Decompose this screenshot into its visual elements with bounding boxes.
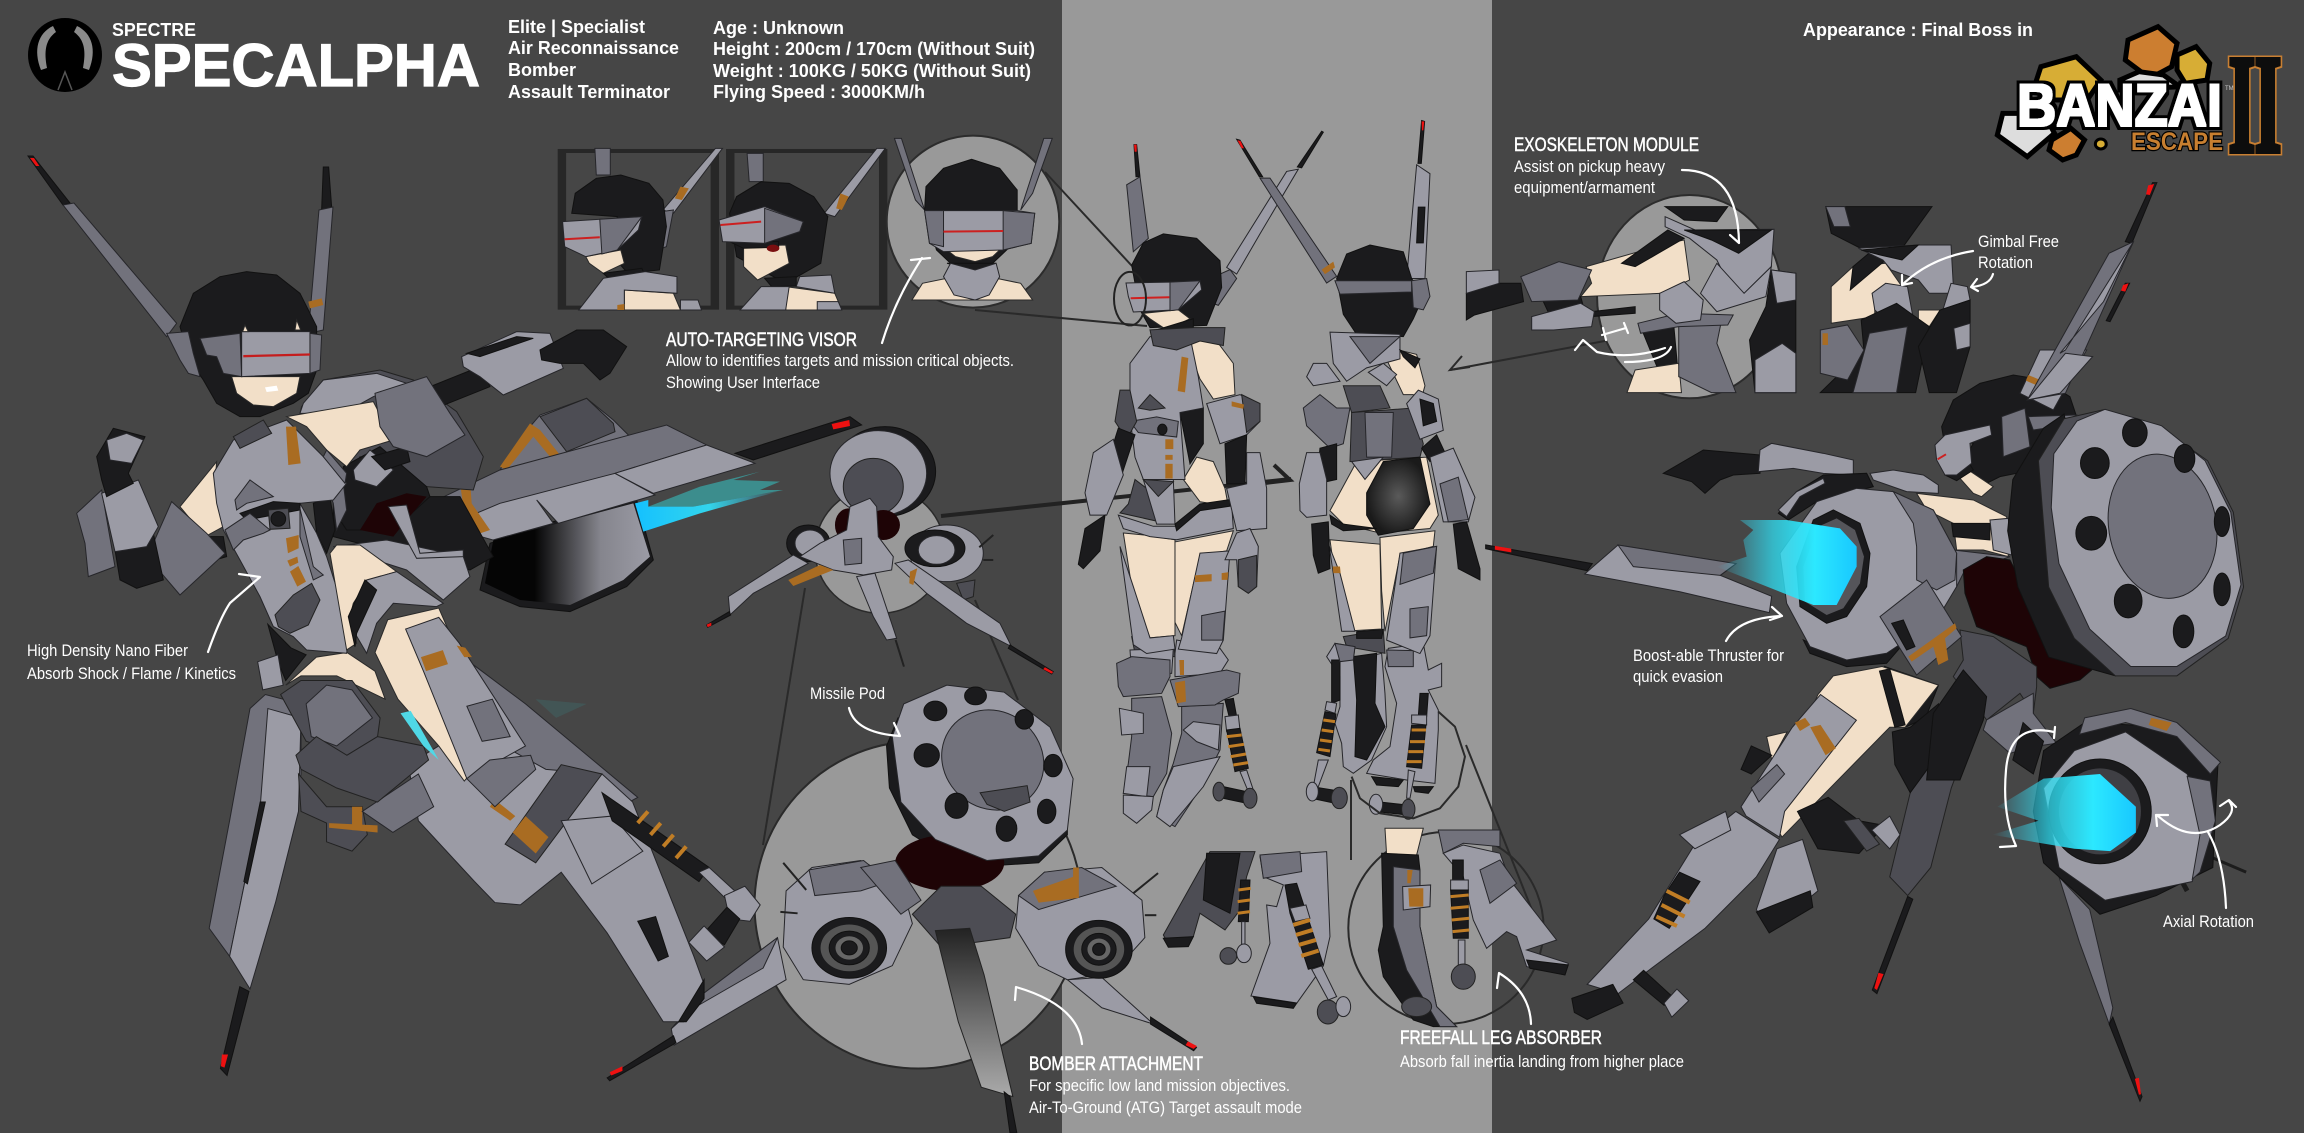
callout: nano fiber: High Density Nano Fiber — [27, 641, 188, 660]
back view lower legs — [1306, 629, 1465, 819]
callout: thruster — [1633, 607, 1784, 686]
banzai escape logo: BANZAI — [2017, 72, 2222, 139]
back legs thighs — [1329, 531, 1437, 654]
leg crop two — [1251, 852, 1351, 1024]
visor closed frame — [562, 148, 723, 310]
callout: thruster: Boost-able Thruster for — [1633, 646, 1784, 665]
front view figure — [1078, 131, 1323, 654]
stats list: Weight : 100KG / 50KG (Without Suit) — [713, 61, 1031, 81]
left figure raised hand — [540, 330, 627, 380]
callout: missile pod: Missile Pod — [810, 684, 885, 703]
head trio: visor detail — [562, 136, 1059, 310]
callout: auto-targeting visor: Allow to identifies targets and mission critical objects. — [666, 351, 1014, 370]
role list: Bomber — [508, 60, 576, 80]
callout: gimbal free rotation — [1902, 232, 2059, 291]
left figure torso and arms — [77, 332, 563, 653]
role list — [508, 17, 679, 102]
front arms — [1078, 390, 1267, 593]
exoskeleton circle view — [1466, 195, 1796, 398]
front legs thighs — [1120, 531, 1233, 654]
visor open frame — [719, 148, 885, 310]
logo mark — [28, 18, 102, 92]
back arms — [1299, 390, 1480, 580]
exoskeleton detail crops — [1466, 183, 2157, 400]
left figure lower blade — [209, 695, 378, 1076]
callout: bomber attachment — [1015, 987, 1302, 1117]
right thruster — [1016, 868, 1158, 980]
missile pod disk — [887, 685, 1073, 891]
callout: auto-targeting visor: AUTO-TARGETING VISOR — [666, 330, 857, 351]
callout: exoskeleton module: Assist on pickup heavy — [1514, 157, 1665, 176]
callout: gimbal free rotation: Gimbal Free — [1978, 232, 2059, 251]
banzai escape logo: ESCAPE — [2131, 128, 2223, 156]
callout: nano fiber — [27, 574, 260, 683]
callout: auto-targeting visor: Showing User Interface — [666, 373, 820, 392]
callout: exoskeleton module: EXOSKELETON MODULE — [1514, 135, 1699, 156]
stats list: Age : Unknown — [713, 18, 844, 38]
callout: freefall leg absorber — [1400, 973, 1684, 1071]
front view lower legs — [1117, 635, 1257, 827]
callout: exoskeleton module: equipment/armament — [1514, 178, 1655, 197]
leg crop four — [1402, 830, 1568, 1017]
leg crop one — [1163, 852, 1255, 964]
callout: axial rotation — [2000, 727, 2254, 931]
leg crop three — [1378, 828, 1457, 1027]
shock spring — [602, 793, 760, 961]
banzai escape logo — [1997, 25, 2281, 183]
highlight circle — [755, 741, 1082, 1069]
left thruster — [780, 860, 921, 984]
role list: Air Reconnaissance — [508, 38, 679, 58]
right figure legs and blades — [1486, 545, 1985, 1019]
role list: Assault Terminator — [508, 82, 670, 102]
title: SPECTRE — [112, 20, 196, 40]
right figure main thruster — [1585, 488, 2057, 780]
banzai escape logo: TM — [2225, 86, 2234, 92]
left figure head and antennas — [28, 156, 333, 417]
front torso — [1118, 328, 1235, 540]
callout: exoskeleton module — [1514, 135, 1739, 362]
back view figure — [1237, 121, 1480, 654]
right figure missile disk — [2008, 409, 2244, 676]
back torso — [1307, 332, 1438, 535]
callout: freefall leg absorber: FREEFALL LEG ABSORBER — [1400, 1028, 1602, 1049]
big bomber attachment — [671, 685, 1197, 1133]
callout: missile pod — [810, 684, 900, 736]
stats list: Flying Speed : 3000KM/h — [713, 82, 925, 102]
callout: nano fiber: Absorb Shock / Flame / Kinetics — [27, 664, 236, 683]
callout: bomber attachment: Air-To-Ground (ATG) Target assault mode — [1029, 1098, 1302, 1117]
title: SPECALPHA — [112, 32, 480, 99]
left hero figure — [28, 156, 862, 1081]
right figure head, arm and back — [1663, 350, 2092, 688]
small bomber overview — [707, 427, 1053, 674]
right figure second thruster — [1992, 709, 2246, 1101]
left figure back pod and wing — [430, 398, 862, 612]
stats list: Height : 200cm / 170cm (Without Suit) — [713, 39, 1035, 59]
right hero figure — [1486, 350, 2246, 1101]
callout: auto-targeting visor — [666, 258, 1014, 392]
callout: gimbal free rotation: Rotation — [1978, 253, 2033, 272]
appearance label: Appearance : Final Boss in — [1803, 20, 2033, 40]
visor front circle — [887, 136, 1059, 308]
callout: bomber attachment: For specific low land mission objectives. — [1029, 1076, 1290, 1095]
leader lines — [763, 172, 1610, 925]
stats list — [713, 18, 1035, 102]
center legs and wings — [671, 886, 1197, 1133]
role list: Elite | Specialist — [508, 17, 645, 37]
callout: thruster: quick evasion — [1633, 667, 1723, 686]
callout: axial rotation: Axial Rotation — [2163, 912, 2254, 931]
leg detail circle — [1348, 832, 1544, 1024]
callout: bomber attachment: BOMBER ATTACHMENT — [1029, 1054, 1203, 1075]
center legs — [1117, 629, 1568, 1027]
callout: freefall leg absorber: Absorb fall inertia landing from higher place — [1400, 1052, 1684, 1071]
exoskeleton back view — [1820, 207, 1970, 393]
left figure lower leg — [258, 608, 760, 1081]
top right blades — [2027, 183, 2157, 400]
